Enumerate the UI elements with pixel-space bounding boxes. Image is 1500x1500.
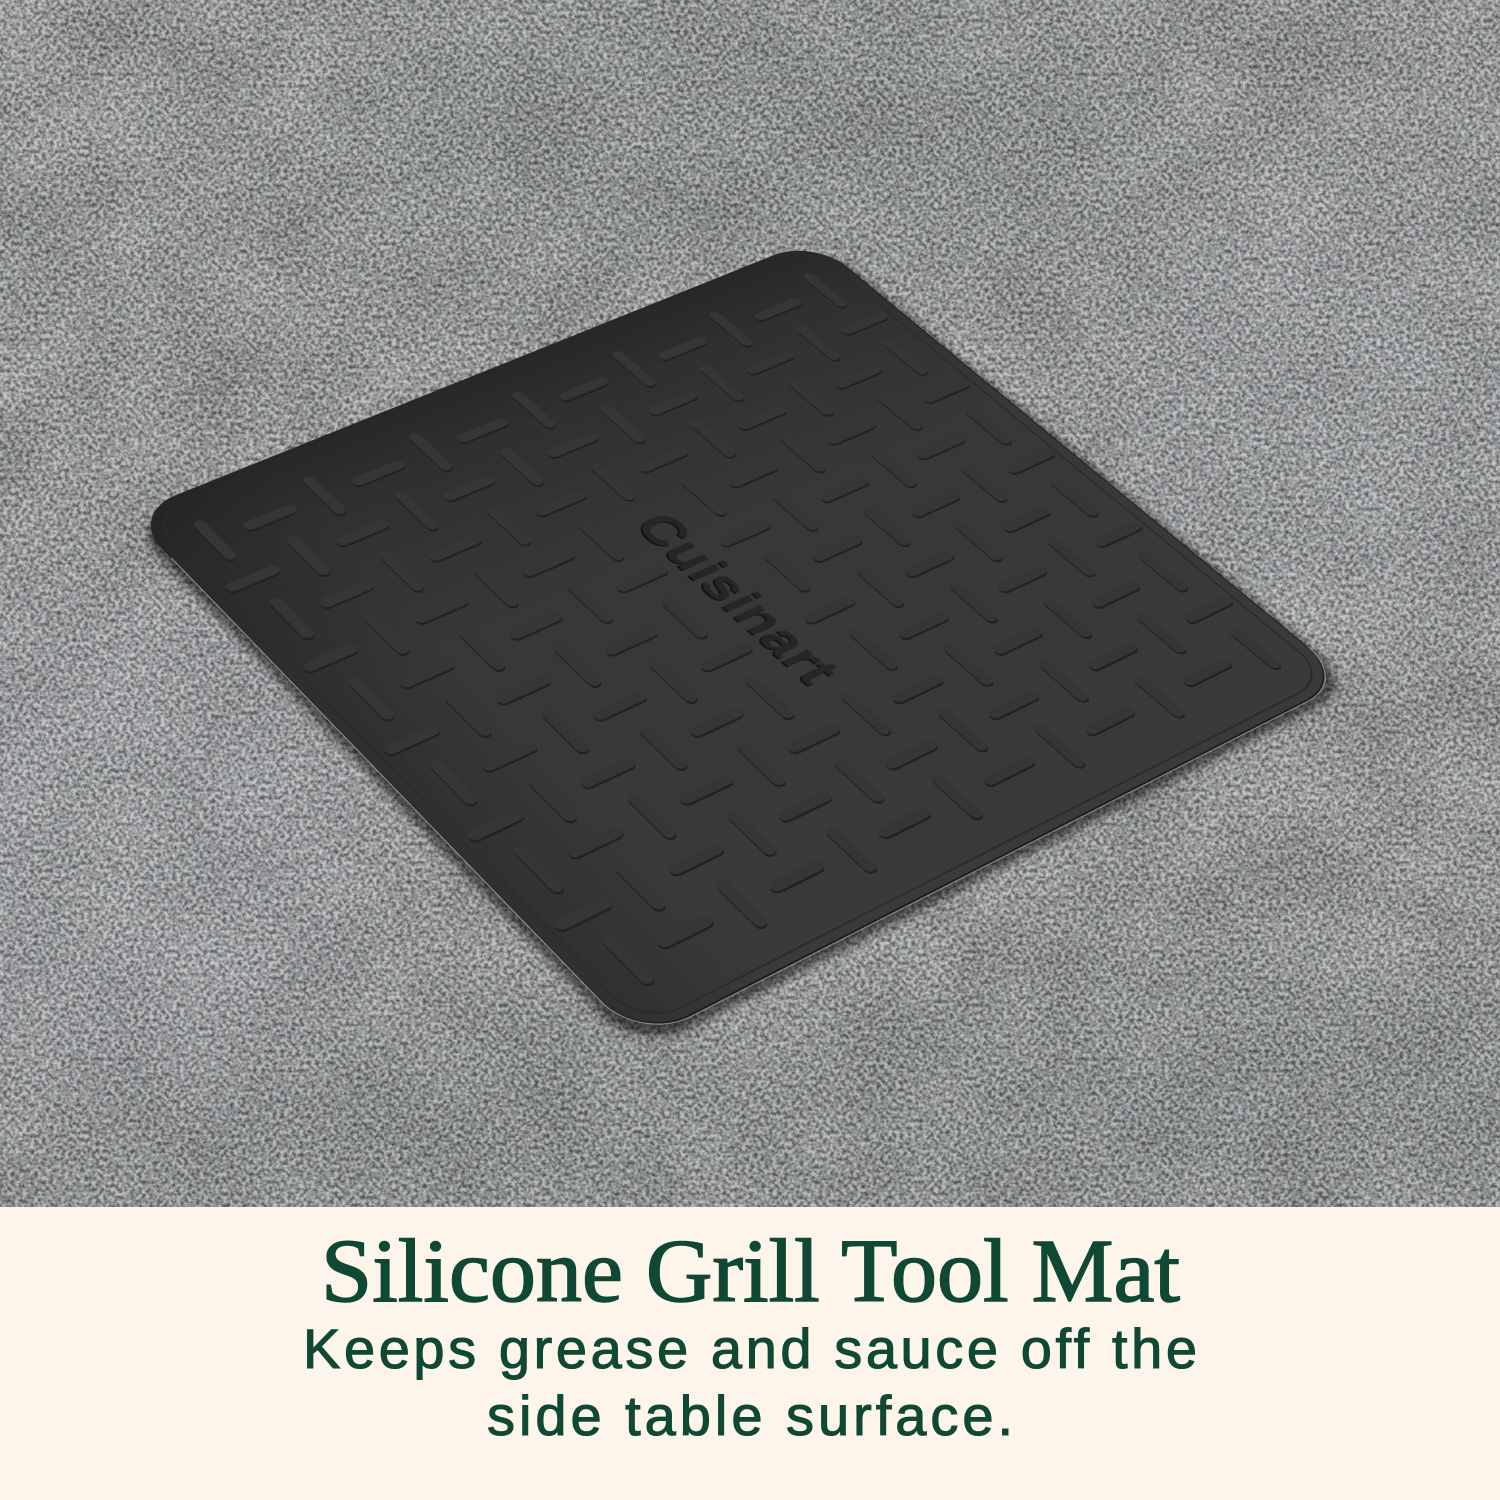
subtitle second line: side table surface. <box>487 1384 1013 1447</box>
logo: Cuisinart: Cuisinart <box>633 518 841 676</box>
silicone mat <box>142 250 1340 1041</box>
logo: Cuisinart: Cuisinart <box>631 519 838 677</box>
embossed tread pattern <box>178 270 1293 992</box>
subtitle: Keeps grease and sauce off the <box>303 1317 1197 1380</box>
caption panel <box>0 1207 1500 1500</box>
title: Silicone Grill Tool Mat <box>321 1222 1180 1321</box>
